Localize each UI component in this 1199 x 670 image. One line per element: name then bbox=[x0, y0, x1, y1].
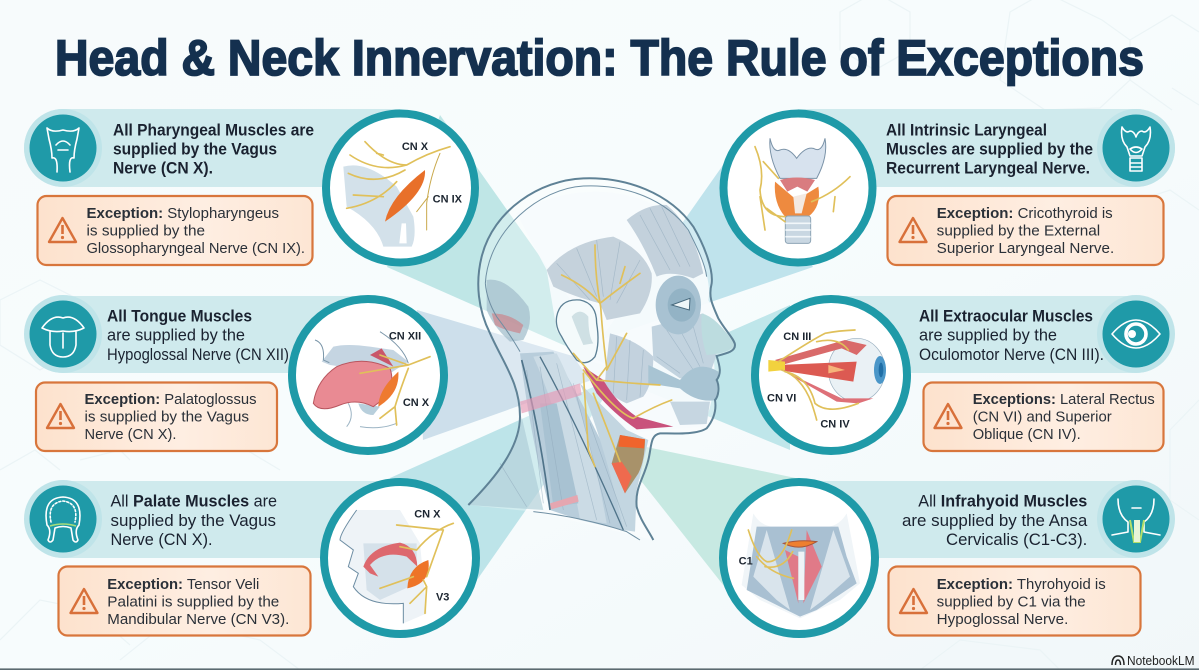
exception text bbox=[973, 391, 1155, 443]
heading text: All Intrinsic Laryngeal bbox=[886, 120, 1047, 140]
exception callout bbox=[924, 382, 1164, 451]
orbicularis oculi bbox=[656, 276, 701, 334]
exception callout bbox=[888, 196, 1164, 265]
label: CN VI: CN VI bbox=[767, 393, 796, 405]
circle illustration: larynx bbox=[724, 114, 872, 262]
label: CN IX: CN IX bbox=[433, 193, 463, 205]
icon: pharynx bbox=[24, 109, 102, 187]
heading text: are supplied by the bbox=[919, 326, 1057, 345]
digastric muscle bbox=[583, 367, 673, 429]
masseter bbox=[605, 333, 653, 403]
exception text: Exception: Palatoglossus bbox=[84, 391, 256, 408]
label: CN XII: CN XII bbox=[389, 331, 421, 343]
chin muscles bbox=[670, 402, 710, 425]
icon: neck bbox=[1097, 480, 1175, 558]
heading text: are supplied by the bbox=[107, 326, 245, 345]
icon: eye bbox=[1097, 295, 1175, 373]
title: Head & Neck Innervation: The Rule of Exceptions bbox=[55, 30, 1144, 86]
exception text: Superior Laryngeal Nerve. bbox=[937, 240, 1114, 257]
heading text: supplied by the Vagus bbox=[110, 511, 276, 530]
exception text bbox=[86, 205, 305, 257]
header band bbox=[831, 296, 1174, 373]
header band bbox=[24, 481, 400, 558]
heading text: are supplied by the Ansa bbox=[902, 511, 1088, 530]
ear bbox=[556, 300, 598, 363]
nerves bbox=[562, 245, 672, 467]
heading text: All Tongue Muscles bbox=[107, 307, 252, 326]
heading text: Recurrent Laryngeal Nerve. bbox=[886, 158, 1090, 178]
header band bbox=[24, 296, 368, 373]
exception text: Exception: Cricothyroid is bbox=[937, 205, 1113, 222]
heading text: Nerve (CN X). bbox=[110, 530, 212, 549]
pink band bbox=[520, 383, 582, 413]
icon: larynx bbox=[1097, 109, 1175, 187]
icon: tongue bbox=[24, 295, 102, 373]
exception text: Hypoglossal Nerve. bbox=[937, 611, 1068, 628]
header band bbox=[24, 109, 400, 187]
label: V3: V3 bbox=[436, 592, 449, 604]
heading text bbox=[919, 307, 1104, 364]
panel: infrahyoid muscles bbox=[723, 480, 1175, 636]
heading text: Muscles are supplied by the bbox=[886, 140, 1093, 158]
exception text: Exception: Tensor Veli bbox=[107, 576, 259, 593]
icon: palate bbox=[24, 480, 102, 558]
label: CN IV: CN IV bbox=[820, 419, 850, 431]
label: CN X: CN X bbox=[414, 508, 441, 520]
central head anatomy illustration bbox=[468, 178, 735, 540]
exception text: Palatini is supplied by the bbox=[107, 593, 279, 610]
exception text: supplied by C1 via the bbox=[937, 593, 1086, 610]
exception text: is supplied by the Vagus bbox=[84, 409, 249, 426]
heading text bbox=[107, 307, 293, 364]
thyrohyoid / larynx orange bbox=[612, 435, 645, 493]
cheek muscles bbox=[652, 313, 717, 378]
label: CN III: CN III bbox=[783, 331, 811, 343]
heading text: Nerve (CN X). bbox=[113, 158, 213, 178]
circle illustration: palate bbox=[324, 482, 476, 634]
neck muscles bbox=[520, 352, 623, 530]
exception text: supplied by the External bbox=[937, 223, 1100, 240]
icon: warning bbox=[900, 218, 926, 242]
inner outline bbox=[485, 186, 707, 540]
occipital muscle bbox=[487, 280, 530, 342]
panel: intrinsic laryngeal muscles bbox=[724, 109, 1175, 265]
nose bbox=[701, 313, 735, 355]
temporalis muscle bbox=[547, 237, 652, 320]
icon: warning bbox=[934, 404, 962, 428]
exception text: is supplied by the bbox=[86, 223, 205, 240]
panel: palate muscles bbox=[24, 480, 476, 636]
icon: warning bbox=[70, 589, 98, 613]
circle illustration: stylopharyngeus bbox=[326, 114, 475, 262]
head silhouette fill bbox=[468, 178, 735, 540]
exception text bbox=[84, 391, 256, 443]
lips and cheek band bbox=[648, 365, 718, 401]
heading text bbox=[902, 492, 1088, 549]
panel: extraocular muscles bbox=[755, 295, 1175, 451]
exception text bbox=[107, 576, 289, 628]
exception text bbox=[937, 576, 1106, 628]
circle illustration: infrahyoid bbox=[723, 482, 875, 634]
logo: NotebookLM: NotebookLM bbox=[1127, 653, 1194, 668]
circle illustration: tongue bbox=[292, 299, 444, 451]
exception text bbox=[937, 205, 1114, 257]
exception text: Exception: Stylopharyngeus bbox=[86, 205, 279, 222]
exception callout bbox=[38, 196, 312, 265]
panel: pharyngeal muscles bbox=[24, 109, 475, 265]
exception text: Glossopharyngeal Nerve (CN IX). bbox=[86, 240, 305, 257]
connector rays from head to circles bbox=[387, 115, 813, 600]
exception callout bbox=[58, 566, 310, 636]
icon: warning bbox=[900, 589, 927, 613]
exception text: Mandibular Nerve (CN V3). bbox=[107, 611, 289, 628]
heading text: Cervicalis (C1-C3). bbox=[946, 530, 1087, 549]
circle illustration: eye bbox=[755, 299, 907, 451]
heading text bbox=[113, 120, 314, 178]
exception callout bbox=[36, 382, 277, 451]
heading text bbox=[110, 492, 277, 549]
frontalis muscle bbox=[627, 205, 703, 278]
throat fill bbox=[580, 383, 648, 532]
head outline bbox=[468, 178, 735, 540]
label: CN X: CN X bbox=[403, 397, 430, 409]
heading text: All Extraocular Muscles bbox=[919, 307, 1093, 326]
heading text: Oculomotor Nerve (CN III). bbox=[919, 345, 1104, 364]
exception text: Exception: Thyrohyoid is bbox=[937, 576, 1106, 593]
icon: warning bbox=[49, 218, 76, 242]
heading text: All Infrahyoid Muscles bbox=[918, 492, 1087, 511]
heading text: supplied by the Vagus bbox=[113, 140, 277, 158]
icon: warning bbox=[47, 404, 74, 428]
label: C1: C1 bbox=[739, 556, 753, 568]
exception callout bbox=[888, 566, 1140, 636]
heading text: All Palate Muscles are bbox=[110, 492, 277, 511]
exception text: (CN VI) and Superior bbox=[973, 409, 1112, 426]
heading text: Hypoglossal Nerve (CN XII). bbox=[107, 345, 293, 364]
header band bbox=[798, 109, 1175, 187]
heading text: All Pharyngeal Muscles are bbox=[113, 120, 314, 140]
face white area bbox=[517, 192, 730, 433]
exception text: Exceptions: Lateral Rectus bbox=[973, 391, 1155, 408]
heading text bbox=[886, 120, 1093, 178]
exception text: Oblique (CN IV). bbox=[973, 426, 1081, 443]
panel: tongue muscles bbox=[24, 295, 444, 451]
label: CN X: CN X bbox=[402, 141, 429, 153]
header band bbox=[799, 481, 1174, 558]
exception text: Nerve (CN X). bbox=[84, 426, 176, 443]
